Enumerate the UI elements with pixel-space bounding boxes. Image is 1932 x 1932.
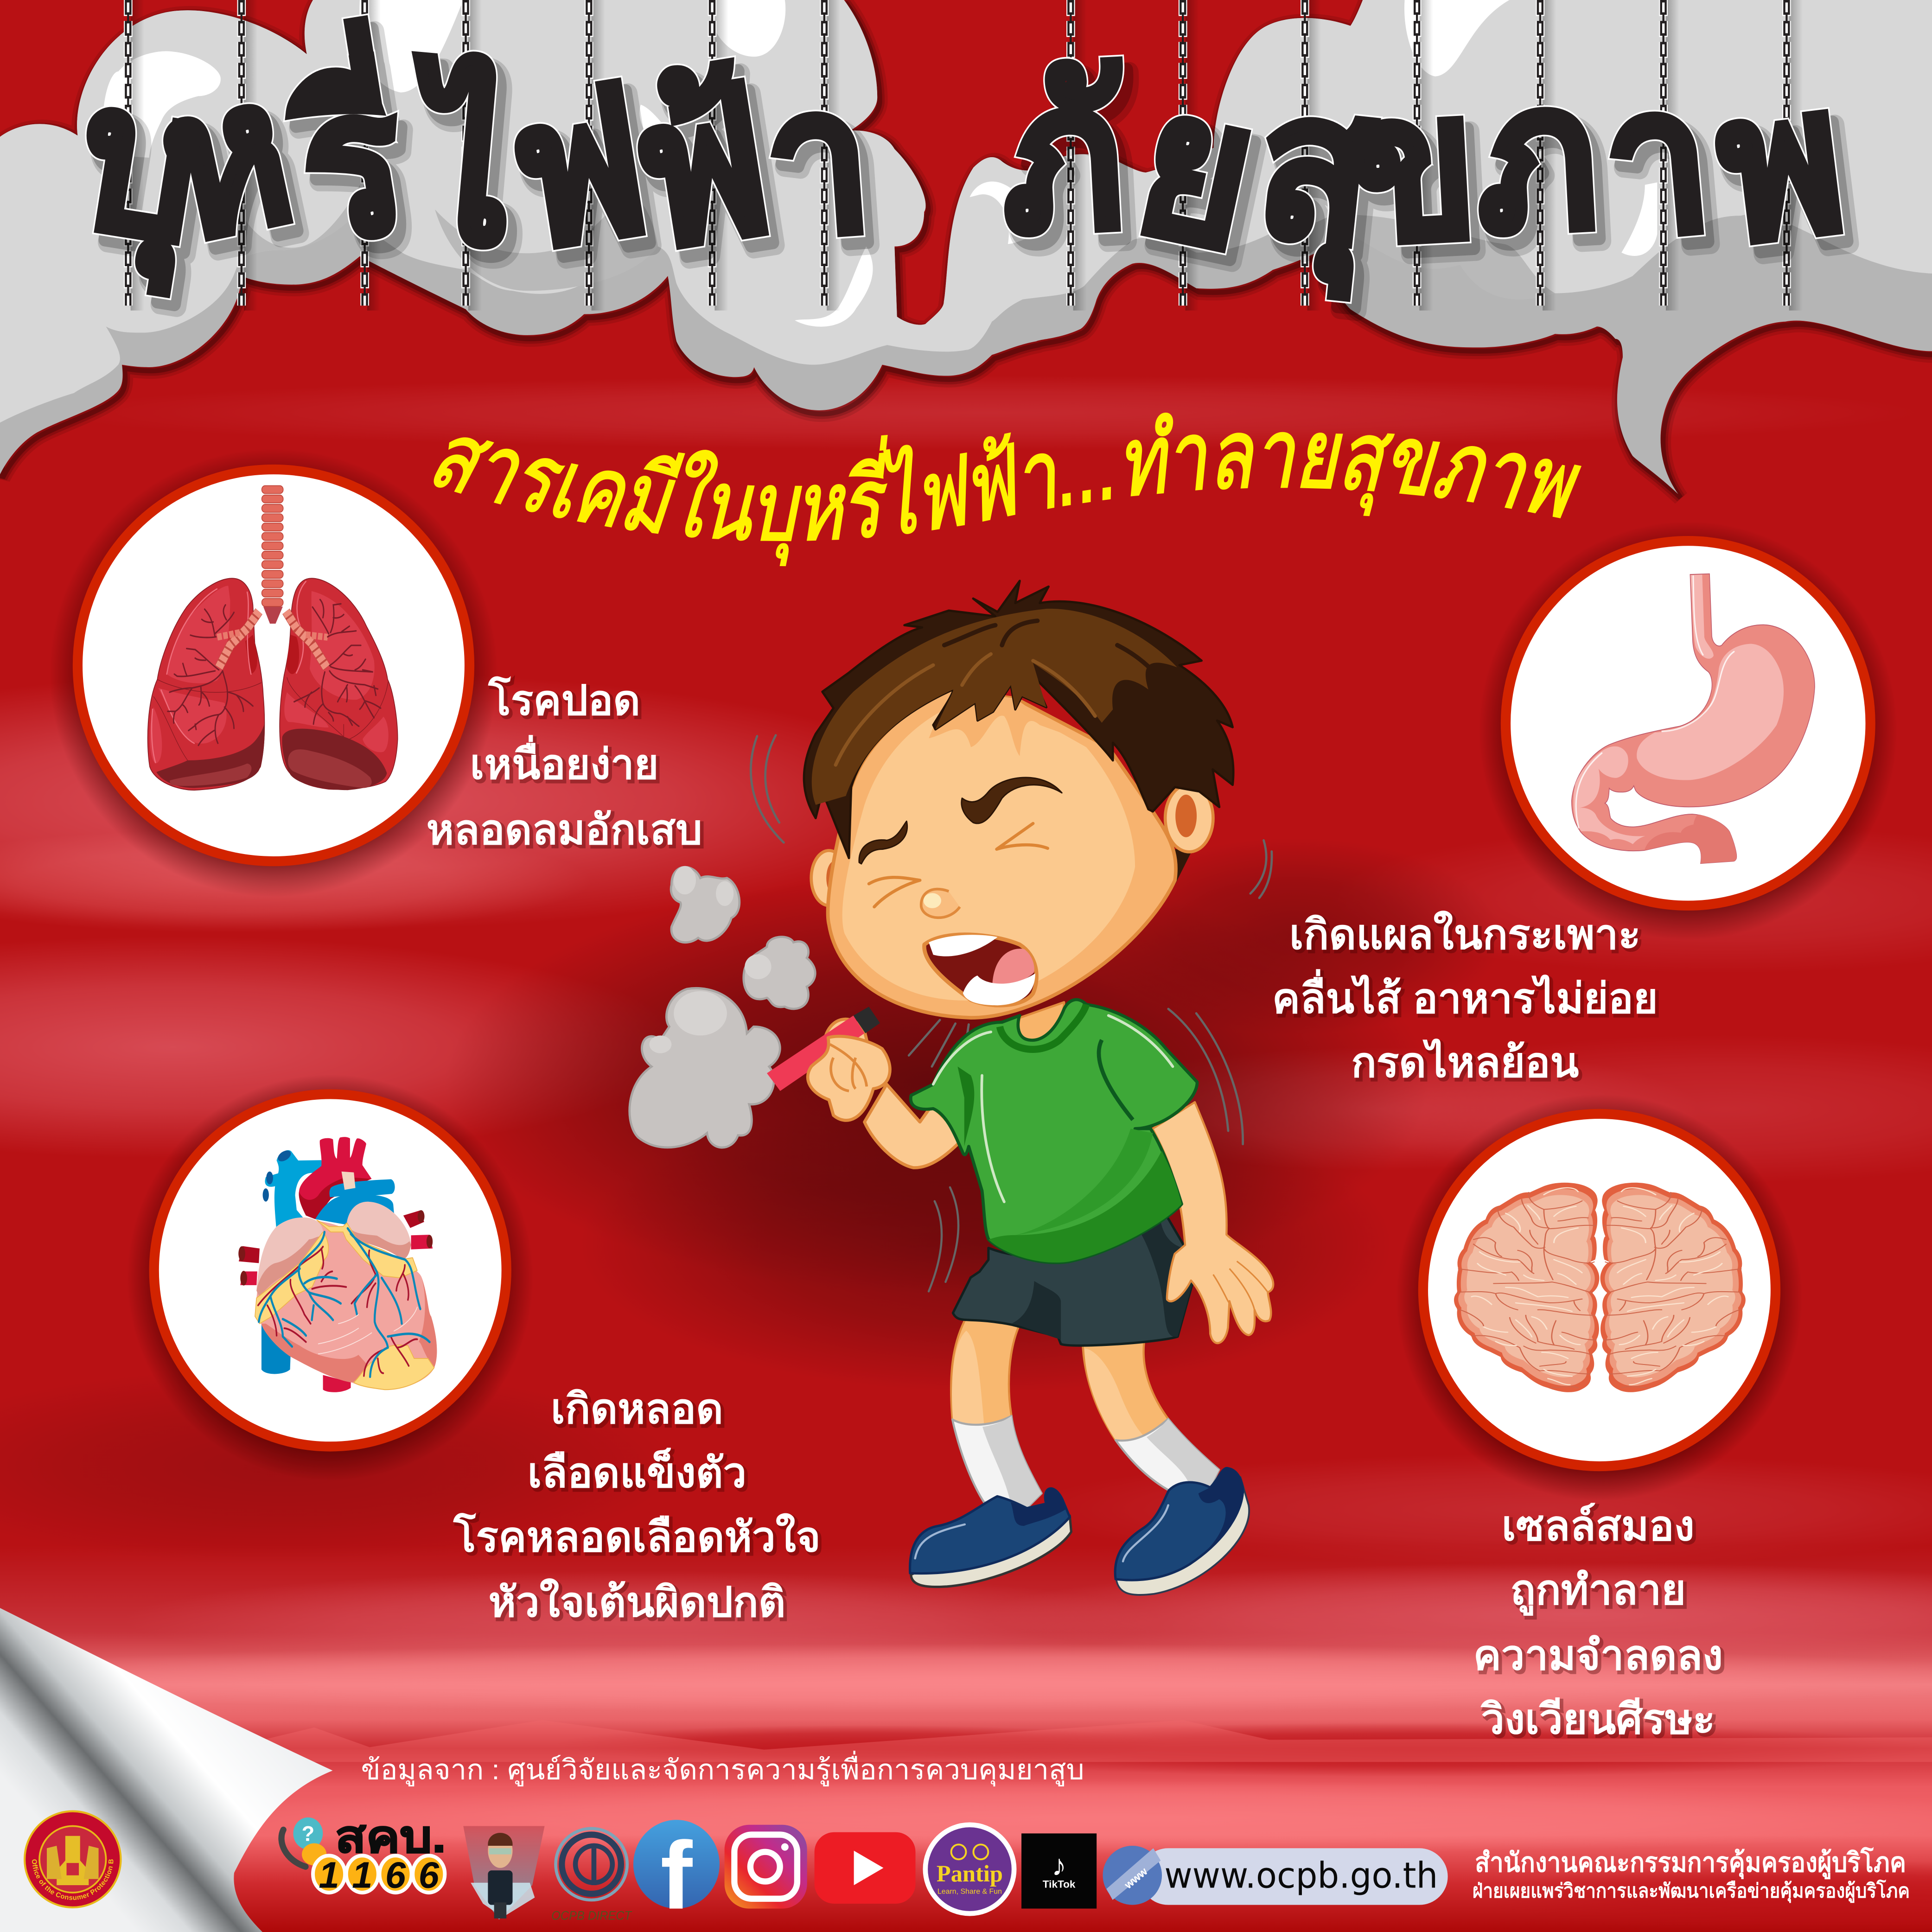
cloud: light front layer [0, 0, 1932, 423]
logo: consumer protection board emblem: Office of the Consumer Protection Board [0, 0, 115, 1902]
left ear [811, 850, 847, 905]
eyes [869, 823, 1048, 907]
hair [804, 581, 1233, 858]
agency name [1473, 1846, 1910, 1903]
title: hanging letters: ภั [995, 41, 1132, 274]
text block: stomach effects [1272, 910, 1660, 1089]
text block: lungs effects: โรคปอด [488, 676, 640, 724]
panel: heart [127, 1074, 534, 1481]
icon: tiktok: ♪ [1052, 1849, 1066, 1882]
hotline [281, 1812, 446, 1895]
icon: stomach [1572, 574, 1815, 863]
mouth [924, 935, 1037, 1005]
title: hanging letters: ย [1121, 47, 1274, 291]
brain circle [1396, 1094, 1803, 1501]
text block: brain effects: วิงเวียนศีรษะ [1480, 1696, 1715, 1743]
nose [921, 889, 960, 918]
text block: heart effects: เลือดแข็งตัว [528, 1447, 746, 1497]
logo: ocpb direct [551, 1829, 632, 1922]
logo: ocpb direct: OCPB DIRECT [551, 1908, 632, 1922]
subtitle: สารเคมีในบุหรี่ไฟฟ้า...ทำลายสุขภาพ [419, 398, 1587, 566]
source credit: ข้อมูลจาก : ศูนย์วิจัยและจัดการความรู้เพื่อการควบคุมยาสูบ [361, 1750, 1084, 1786]
icon: tiktok: TikTok [1043, 1878, 1076, 1890]
heart circle [127, 1074, 534, 1481]
logo: pantip: Learn, Share & Fun [937, 1888, 1002, 1896]
title: hanging letters [63, 16, 1865, 313]
text block: heart effects: หัวใจเต้นผิดปกติ [488, 1578, 785, 1626]
lower body: legs, shoes, shorts, arm [910, 1102, 1273, 1595]
text block: heart effects [453, 1385, 823, 1628]
title: hanging letters: พ [1706, 44, 1855, 284]
cloud: white highlights [103, 0, 1657, 327]
icon: instagram [725, 1825, 807, 1909]
icon: brain [1454, 1183, 1746, 1392]
title: hanging letters: บุ [63, 41, 216, 297]
neck-side hair [1175, 849, 1192, 885]
text block: heart effects: เกิดหลอด [551, 1385, 723, 1432]
hotline: 1 [319, 1854, 339, 1895]
title: hanging letters: ฟ้ [619, 46, 784, 291]
title: hanging letters: ข [1344, 51, 1482, 284]
text block: stomach effects: เกิดแผลในกระเพาะ [1289, 910, 1641, 958]
text block: lungs effects: เหนื่อยง่าย [470, 735, 659, 788]
icon: facebook: f [660, 1822, 693, 1929]
cloud: dark back layer [0, 0, 1932, 494]
icon: facebook [633, 1820, 720, 1929]
text block: stomach effects: คลื่นไส้ อาหารไม่ย่อย [1272, 969, 1658, 1022]
hotline: สคบ. [335, 1812, 446, 1862]
hotline: 6 [419, 1854, 440, 1895]
title: hanging letters: า [759, 45, 878, 278]
smoke cloud banner [0, 0, 1932, 498]
panel: brain [1396, 1094, 1803, 1501]
stomach circle [1479, 521, 1898, 940]
shirt and hand [767, 1000, 1197, 1262]
icon: man [463, 1826, 545, 1919]
logo: pantip: Pantip [937, 1861, 1003, 1887]
cloud: darker inner lobes [239, 185, 1555, 300]
cloud: shadow [2, 4, 1932, 498]
page curl [0, 1608, 333, 1932]
character: coughing boy vaping [630, 581, 1273, 1595]
lungs circle [49, 448, 498, 897]
eyebrows [859, 778, 1062, 864]
text block: brain effects [1473, 1503, 1725, 1745]
text block: brain effects: ถูกทำลาย [1510, 1567, 1686, 1616]
hanging chains [128, 0, 1803, 311]
text block: lungs effects [427, 676, 705, 856]
icon: heart [238, 1137, 437, 1392]
hotline: 1 [352, 1854, 372, 1895]
title: hanging letters: สุ [1246, 49, 1384, 300]
head [804, 581, 1233, 1018]
title: hanging letters: รี่ [274, 16, 419, 286]
icon: youtube [815, 1832, 916, 1904]
website pill: www.ocpb.go.th [1164, 1855, 1438, 1896]
text block: stomach effects: กรดไหลย้อน [1351, 1039, 1579, 1086]
title: hanging letters: ภ [1470, 41, 1603, 274]
text block: lungs effects: หลอดลมอักเสบ [427, 806, 702, 853]
website pill: www [1122, 1865, 1150, 1892]
face [828, 689, 1176, 1018]
icon: tiktok [1021, 1833, 1097, 1909]
hotline: ? [302, 1822, 314, 1845]
title: hanging letters: า [1596, 44, 1719, 279]
panel: stomach [1479, 521, 1898, 940]
vapor puffs and motion lines [630, 735, 1272, 1148]
title: hanging letters: ไ [395, 48, 525, 287]
panel: lungs [49, 448, 498, 897]
right ear [1165, 784, 1213, 852]
text block: heart effects: โรคหลอดเลือดหัวใจ [453, 1513, 821, 1561]
icon: lungs [148, 486, 398, 790]
website pill [1103, 1846, 1448, 1905]
hotline: 6 [385, 1854, 406, 1895]
title: hanging letters: ฟ [496, 46, 660, 291]
title: hanging letters: ห [142, 35, 309, 283]
text block: brain effects: เซลล์สมอง [1502, 1503, 1695, 1549]
logo: pantip [925, 1825, 1014, 1913]
text block: brain effects: ความจำลดลง [1473, 1632, 1723, 1679]
